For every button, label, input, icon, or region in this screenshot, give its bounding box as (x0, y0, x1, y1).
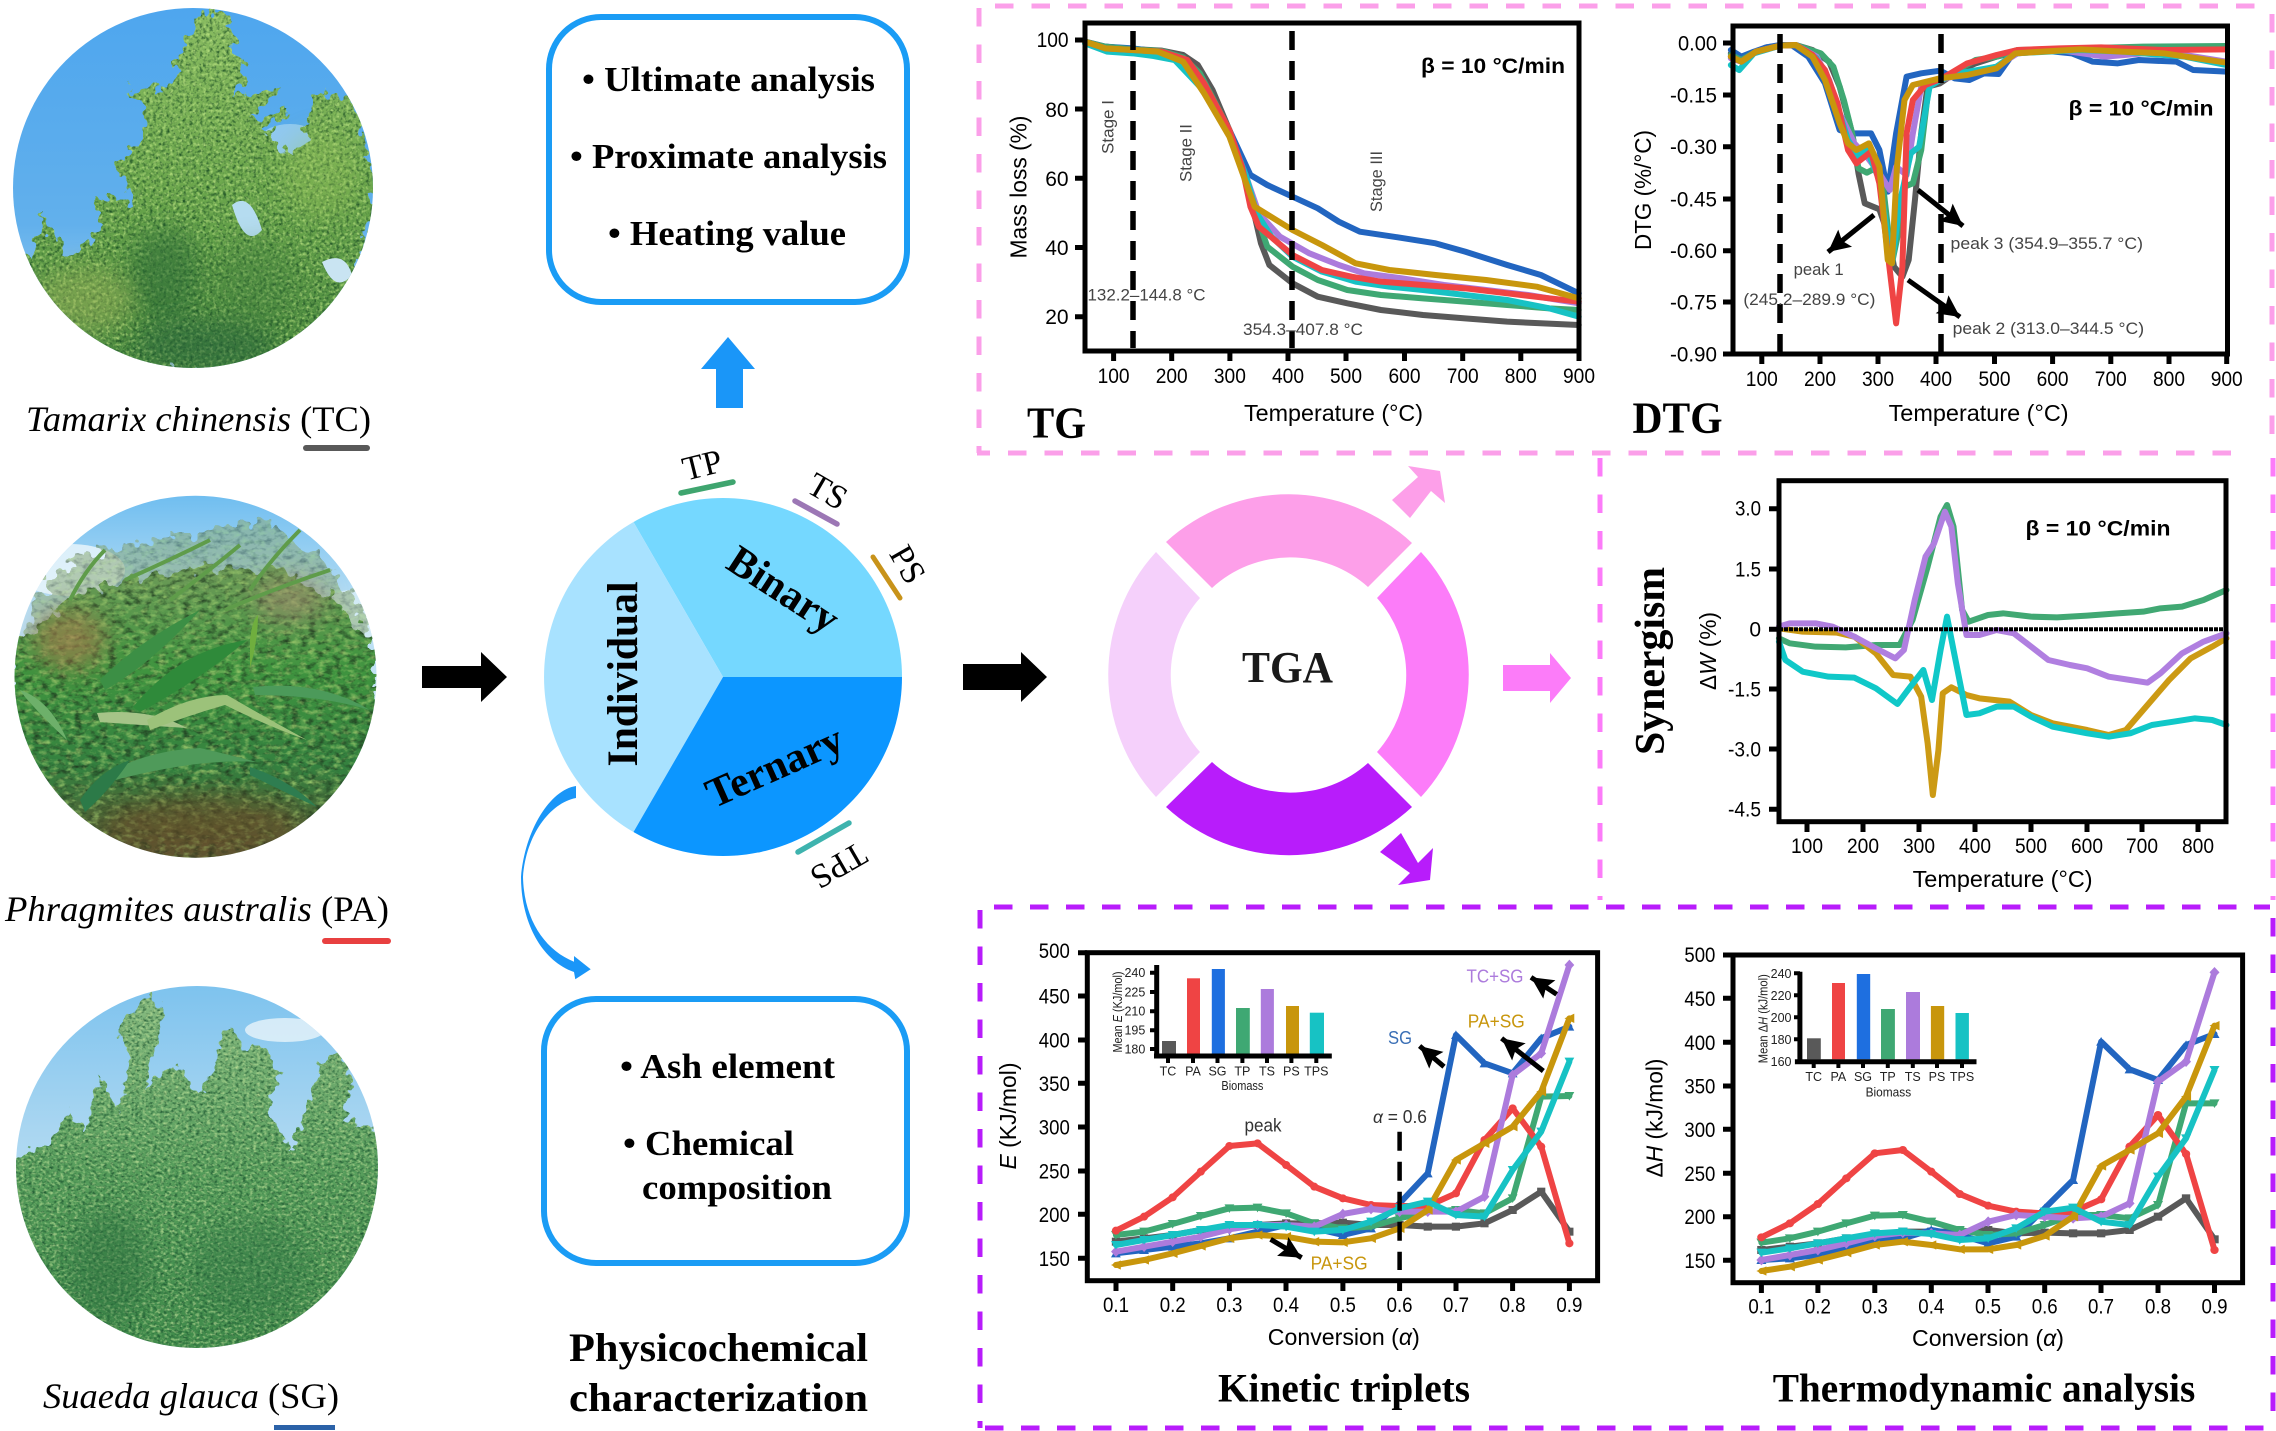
kinetic annotations: SG (1388, 1028, 1412, 1048)
thermodynamic axis titles: Conversion (α) (1912, 1325, 2064, 1351)
sector: Individual (544, 522, 723, 832)
thermodynamic inset bar chart: Biomass (1866, 1086, 1911, 1100)
DTG axis titles: DTG (%/°C) (1630, 130, 1656, 250)
kinetic inset bar chart: 180 (1124, 1042, 1145, 1056)
kinetic tick labels: 500 (1039, 940, 1070, 963)
synergism heading: Synergism (1628, 567, 1674, 755)
kinetic tick labels: 400 (1039, 1030, 1070, 1052)
TG tick labels: 400 (1272, 365, 1304, 388)
synergism axis titles (1695, 612, 2093, 892)
kinetic axis titles (995, 1062, 1420, 1350)
DTG tick labels: -0.15 (1670, 84, 1717, 108)
TG tick labels: 20 (1045, 306, 1069, 329)
TG tick labels: 500 (1330, 365, 1362, 388)
synergism heating rate: β = 10 °C/min (2026, 518, 2170, 541)
kinetic inset bar chart: PS (1283, 1065, 1300, 1079)
synergism tick labels: 1.5 (1735, 558, 1761, 582)
TG annotations: 354.3–407.8 °C (1243, 320, 1363, 339)
ring: TGA (1108, 494, 1469, 855)
DTG tick labels: 500 (1978, 368, 2010, 391)
thermodynamic tick labels: 0.2 (1805, 1295, 1831, 1318)
kinetic tick labels: 0.8 (1500, 1294, 1526, 1317)
arrow: blends to TGA (963, 652, 1047, 702)
kinetic inset bar chart: 225 (1124, 986, 1145, 1000)
DTG tick labels: 300 (1862, 368, 1894, 391)
marker: TS: TS (801, 466, 854, 518)
DTG tick labels: -0.60 (1670, 240, 1717, 263)
DTG peak annotations: (245.2–289.9 °C) (1743, 290, 1875, 309)
kinetic axis titles: E (KJ/mol) (995, 1062, 1021, 1170)
DTG axes (1723, 26, 2228, 364)
kinetic tick labels: 0.9 (1556, 1294, 1582, 1317)
TG tick labels: 300 (1214, 365, 1246, 388)
synergism tick labels: 200 (1847, 835, 1879, 858)
thermodynamic tick labels: 0.5 (1975, 1295, 2001, 1318)
ring segment: bottom (1166, 762, 1412, 855)
DTG peak arrows (1828, 190, 1963, 317)
arrow: TGA to kinetics (1380, 833, 1433, 885)
TG tick labels: 200 (1156, 365, 1188, 388)
kinetic annotations (1244, 966, 1525, 1273)
panel: ash element and chemical composition: composition (642, 1168, 832, 1207)
synergism tick labels: 3.0 (1735, 498, 1761, 520)
kinetic tick labels: 0.3 (1216, 1294, 1242, 1317)
thermodynamic tick labels: 0.9 (2202, 1295, 2228, 1318)
thermodynamic inset bar chart (1756, 967, 1976, 1100)
DTG tick labels: 700 (2095, 368, 2127, 391)
kinetic annotations: TC+SG (1466, 966, 1524, 986)
kinetic inset bar chart: PA (1185, 1065, 1202, 1079)
caption: Phragmites australis: Phragmites australis (PA) (4, 889, 389, 929)
thermodynamic tick labels: 0.8 (2145, 1295, 2171, 1318)
kinetic inset bar chart: TPS (1304, 1065, 1328, 1079)
kinetic annotations: peak (1244, 1116, 1282, 1136)
DTG peak annotations (1743, 234, 2144, 338)
kinetic heading: Kinetic triplets (1218, 1366, 1470, 1411)
panel: thermodynamic analysis chart (1642, 944, 2243, 1411)
TG tick labels: 700 (1447, 365, 1479, 388)
panel: kinetic triplets chart (995, 940, 1598, 1411)
thermodynamic heading: Thermodynamic analysis (1773, 1366, 2195, 1411)
DTG tick labels: 100 (1746, 368, 1778, 391)
thermodynamic axis titles: ΔH (kJ/mol) (1642, 1058, 1668, 1178)
synergism tick labels: 100 (1791, 835, 1823, 858)
arrow: up to analysis panel (701, 337, 755, 408)
panel: ultimate and proximate analysis: • Ultimate analysis (582, 60, 875, 99)
synergism curves (1779, 505, 2226, 795)
thermodynamic inset bar chart: TC (1805, 1070, 1822, 1084)
kinetic tick labels: 350 (1039, 1073, 1070, 1096)
TG tick labels: 100 (1037, 29, 1069, 52)
synergism tick labels: 700 (2126, 835, 2158, 858)
TG tick labels: 80 (1045, 99, 1069, 122)
DTG tick labels (1670, 32, 2243, 391)
synergism tick labels: 300 (1903, 835, 1935, 858)
thermodynamic inset bar chart: SG (1854, 1070, 1872, 1084)
caption: Tamarix chinensis: Tamarix chinensis (TC) (26, 399, 371, 439)
DTG tick labels: 0.00 (1678, 32, 1717, 56)
arrow: plants to blends (422, 652, 507, 702)
panel: ultimate and proximate analysis: • Proximate analysis (570, 137, 887, 176)
TG annotations: Stage I (1099, 100, 1118, 154)
thermodynamic tick labels: 0.3 (1862, 1295, 1888, 1318)
thermodynamic inset bar chart: 200 (1771, 1011, 1792, 1025)
synergism axis titles: ΔW (%) (1695, 612, 1721, 690)
kinetic curves (1116, 965, 1569, 1265)
kinetic inset bar chart: Mean E (KJ/mol) (1111, 972, 1125, 1052)
TG annotations: Stage II (1176, 124, 1196, 182)
DTG tick labels: -0.90 (1670, 344, 1717, 366)
synergism tick labels: 500 (2015, 835, 2047, 858)
photo: Tamarix chinensis (10, 5, 376, 372)
DTG tick labels: -0.75 (1670, 292, 1717, 314)
label: Individual: Individual (600, 581, 647, 766)
synergism axis titles: Temperature (°C) (1913, 866, 2093, 892)
synergism axes (1769, 481, 2226, 832)
panel: ash element and chemical composition (544, 999, 907, 1263)
kinetic tick labels: 0.7 (1443, 1294, 1469, 1317)
thermodynamic inset bar chart: TP (1880, 1070, 1896, 1084)
marker: TPS: TPS (804, 834, 873, 896)
thermodynamic tick labels: 200 (1684, 1206, 1715, 1229)
label: Binary: Binary (719, 537, 847, 643)
kinetic inset bar chart: TS (1259, 1065, 1275, 1079)
arrow: TGA to synergism (1503, 653, 1571, 703)
DTG tick labels: -0.45 (1670, 188, 1717, 212)
kinetic annotations: PA+SG (1311, 1253, 1368, 1273)
DTG tick labels: 200 (1804, 368, 1836, 391)
heading: physicochemical characterization: characterization (569, 1375, 868, 1420)
TG annotations: Stage III (1367, 151, 1386, 212)
kinetic tick labels: 450 (1039, 986, 1070, 1008)
kinetic annotations: PA+SG (1468, 1011, 1525, 1031)
panel: ash element and chemical composition: • Chemical (623, 1124, 794, 1163)
kinetic inset bar chart: 240 (1124, 966, 1145, 980)
thermodynamic inset bar chart: TPS (1950, 1070, 1974, 1084)
kinetic inset bar chart (1111, 965, 1332, 1093)
kinetic tick labels: 150 (1039, 1248, 1070, 1271)
TG heading: TG (1027, 399, 1086, 448)
DTG heading: DTG (1632, 394, 1722, 443)
thermodynamic inset bar chart: 180 (1771, 1033, 1792, 1047)
DTG tick labels: 800 (2153, 368, 2185, 391)
thermodynamic tick labels: 300 (1684, 1119, 1715, 1142)
panel: ultimate and proximate analysis: • Heating value (608, 214, 846, 253)
kinetic tick labels: 0.1 (1103, 1294, 1129, 1317)
kinetic inset bar chart: SG (1208, 1065, 1227, 1079)
label: Ternary: Ternary (699, 717, 851, 818)
sector: Binary (634, 498, 902, 677)
TG axis titles: Temperature (°C) (1244, 400, 1423, 426)
thermodynamic curves (1761, 972, 2215, 1271)
thermodynamic tick labels: 0.4 (1918, 1295, 1945, 1318)
kinetic inset bar chart: 195 (1124, 1024, 1145, 1038)
synergism tick labels: 600 (2071, 835, 2103, 858)
kinetic tick labels: 0.2 (1160, 1294, 1186, 1317)
TG tick labels: 40 (1045, 237, 1069, 260)
TG annotations: 132.2–144.8 °C (1088, 286, 1206, 305)
caption: Suaeda glauca: Suaeda glauca (SG) (43, 1376, 339, 1416)
kinetic tick labels: 250 (1039, 1160, 1070, 1184)
kinetic tick labels: 200 (1039, 1204, 1070, 1227)
ring segment: left (1108, 552, 1200, 797)
kinetic tick labels: 0.4 (1273, 1294, 1299, 1317)
thermodynamic axes (1723, 955, 2243, 1293)
synergism tick labels: 0 (1749, 618, 1761, 642)
thermodynamic tick labels: 450 (1684, 988, 1715, 1011)
kinetic annotations: α = 0.6 (1373, 1107, 1427, 1127)
synergism tick labels: 800 (2182, 835, 2214, 858)
DTG axis titles: Temperature (°C) (1889, 400, 2069, 426)
thermodynamic tick labels: 500 (1684, 944, 1715, 967)
DTG tick labels: -0.30 (1670, 136, 1717, 159)
panel: ultimate and proximate analysis (549, 17, 907, 302)
thermodynamic tick labels: 0.6 (2032, 1295, 2058, 1318)
TG tick labels (1037, 29, 1595, 388)
kinetic inset bar chart: TP (1234, 1065, 1250, 1079)
synergism tick labels: -3.0 (1728, 738, 1761, 762)
sector: Ternary (634, 677, 902, 856)
heading: physicochemical characterization (569, 1325, 868, 1420)
DTG peak annotations: peak 1 (1794, 260, 1844, 279)
synergism tick labels: -4.5 (1728, 798, 1761, 822)
thermodynamic inset bar chart: 160 (1771, 1055, 1792, 1069)
thermodynamic tick labels: 350 (1684, 1076, 1715, 1098)
DTG tick labels: 400 (1920, 368, 1952, 391)
thermodynamic inset bar chart: TS (1905, 1070, 1921, 1084)
thermodynamic tick labels: 150 (1684, 1250, 1715, 1273)
DTG peak annotations: peak 2 (313.0–344.5 °C) (1953, 319, 2144, 338)
kinetic inset bar chart: 210 (1124, 1004, 1145, 1018)
arrow: curved, to ash panel (521, 786, 591, 979)
synergism tick labels: -1.5 (1728, 678, 1761, 702)
TG tick labels: 60 (1045, 168, 1069, 191)
kinetic tick labels: 0.6 (1387, 1294, 1413, 1317)
thermodynamic tick labels: 400 (1684, 1032, 1715, 1055)
label: TGA: TGA (1242, 643, 1333, 692)
thermodynamic inset bar chart: 240 (1771, 967, 1792, 981)
DTG axis titles (1630, 130, 2069, 426)
pie: blend categories (544, 498, 902, 856)
TG tick labels: 100 (1098, 365, 1130, 388)
kinetic tick labels (1039, 940, 1582, 1317)
kinetic inset bar chart: Biomass (1221, 1079, 1263, 1093)
panel: ash element and chemical composition: • Ash element (620, 1047, 835, 1086)
ring segment: right (1377, 552, 1469, 797)
TG curves (1085, 42, 1579, 325)
thermodynamic tick labels (1684, 944, 2228, 1318)
panel: synergism chart (1628, 481, 2226, 892)
kinetic axis titles: Conversion (α) (1268, 1324, 1420, 1350)
heading: physicochemical characterization: Physicochemical (569, 1325, 868, 1370)
DTG tick labels: 600 (2037, 368, 2069, 391)
thermodynamic inset bar chart: 220 (1771, 989, 1792, 1003)
kinetic tick labels: 300 (1039, 1116, 1070, 1140)
kinetic tick labels: 0.5 (1330, 1294, 1356, 1317)
TG tick labels: 600 (1388, 365, 1420, 388)
thermodynamic inset bar chart: Mean ΔH (kJ/mol) (1756, 974, 1770, 1063)
photo: Suaeda glauca (10, 980, 386, 1360)
TG tick labels: 900 (1563, 365, 1595, 388)
photo: Phragmites australis (10, 490, 382, 862)
thermodynamic tick labels: 250 (1684, 1163, 1715, 1186)
ring segment: top (1166, 494, 1412, 588)
synergism tick labels: 400 (1959, 835, 1991, 858)
TG axes (1075, 23, 1579, 361)
thermodynamic axis titles (1642, 1058, 2064, 1351)
marker: PS: PS (882, 539, 933, 590)
kinetic arrows (1271, 977, 1557, 1258)
TG axis titles: Mass loss (%) (1006, 116, 1032, 258)
thermodynamic tick labels: 0.1 (1748, 1295, 1774, 1318)
TG heating rate: β = 10 °C/min (1421, 55, 1565, 78)
DTG peak annotations: peak 3 (354.9–355.7 °C) (1950, 234, 2143, 253)
synergism tick labels (1728, 498, 2214, 858)
arrow: TGA to TG panel (1392, 466, 1445, 518)
panel: TG chart (1006, 23, 1595, 448)
DTG heating rate: β = 10 °C/min (2068, 98, 2214, 121)
marker: TP: TP (679, 443, 726, 489)
thermodynamic tick labels: 0.7 (2088, 1295, 2114, 1318)
thermodynamic inset bar chart: PA (1831, 1070, 1847, 1084)
TG annotations (1088, 100, 1386, 339)
TG tick labels: 800 (1505, 365, 1537, 388)
TG axis titles (1006, 116, 1423, 426)
kinetic inset bar chart: TC (1160, 1065, 1176, 1079)
kinetic axes (1078, 953, 1598, 1291)
DTG curves (1731, 45, 2227, 323)
thermodynamic inset bar chart: PS (1929, 1070, 1945, 1084)
panel: DTG chart (1630, 26, 2243, 443)
DTG tick labels: 900 (2211, 368, 2243, 391)
